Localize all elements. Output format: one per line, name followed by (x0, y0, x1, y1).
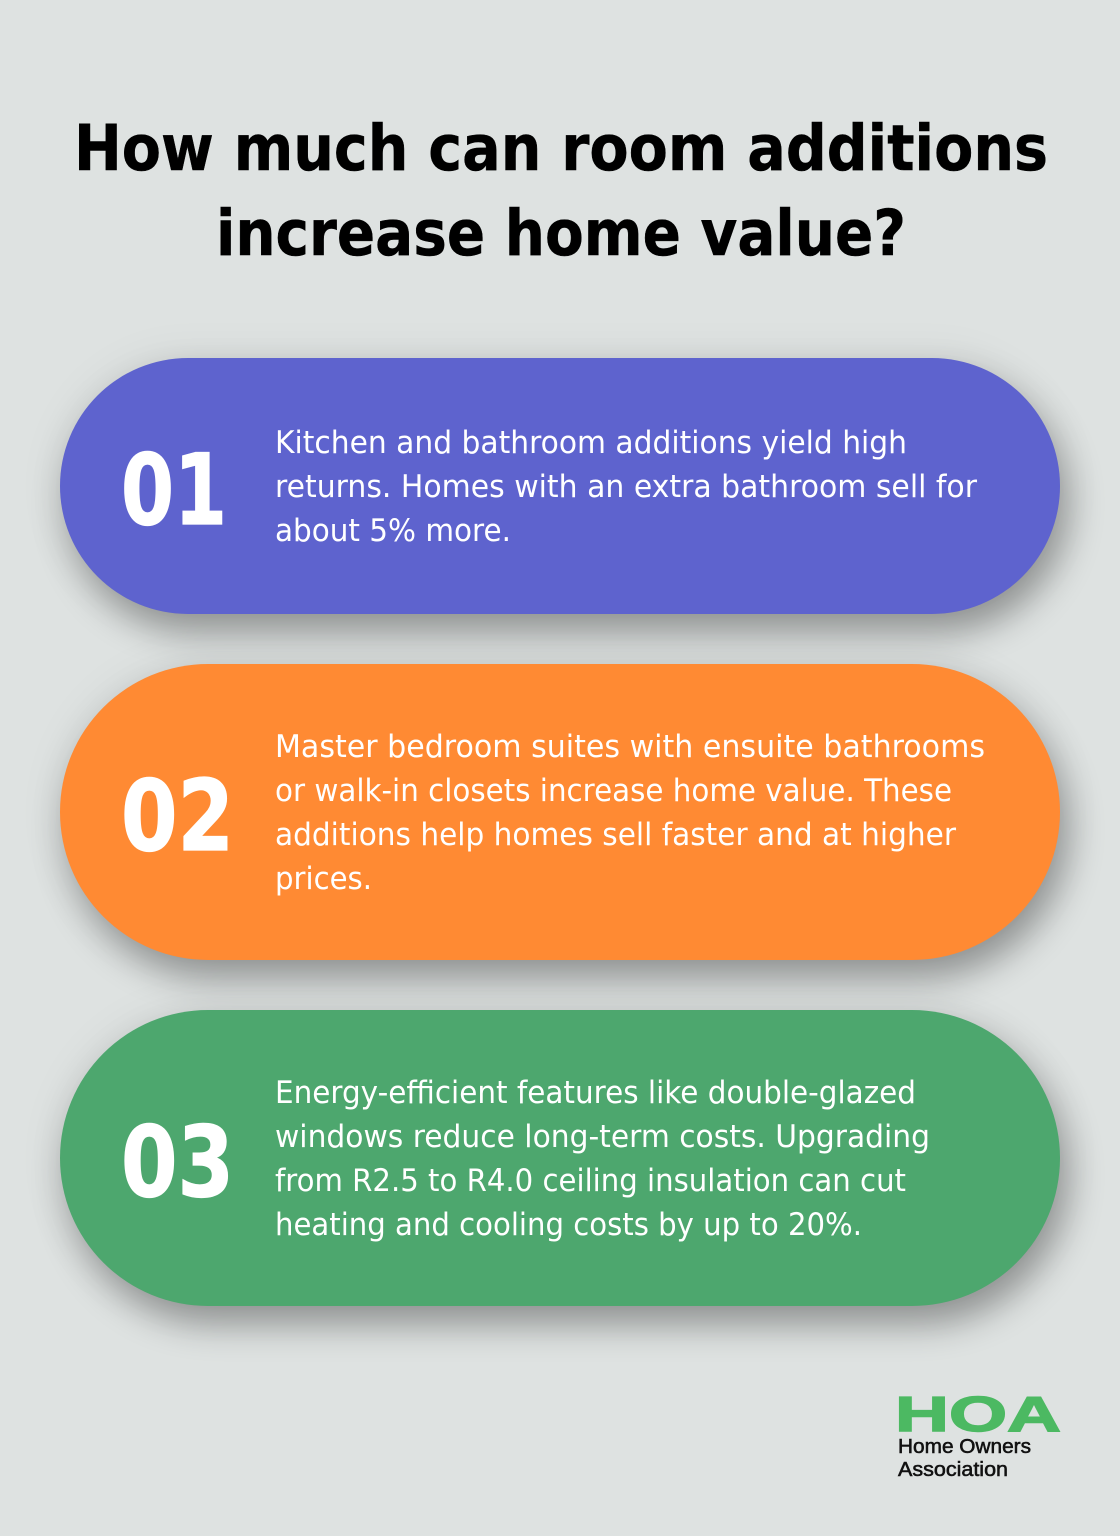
number 03: 03 (121, 1106, 234, 1220)
text: card 02: or walk-in closets increase home value. These (275, 773, 952, 809)
text: card 03: Energy-efficient features like double-glazed (275, 1075, 916, 1111)
number 02: 02 (121, 760, 234, 874)
logo: HOA (895, 1388, 1061, 1481)
text: card 01 (275, 425, 977, 549)
text: card 02 (275, 729, 985, 897)
text: card 01: returns. Homes with an extra bathroom sell for (275, 469, 977, 505)
text: card 02: Master bedroom suites with ensuite bathrooms (275, 729, 985, 765)
text: card 01: about 5% more. (275, 513, 511, 549)
logo: HOA: Association (898, 1459, 1008, 1481)
text: card 03 (275, 1075, 930, 1243)
text: card 03: from R2.5 to R4.0 ceiling insulation can cut (275, 1163, 906, 1199)
title: increase home value? (216, 197, 906, 270)
title: How much can room additions (74, 112, 1048, 185)
text: card 01: Kitchen and bathroom additions yield high (275, 425, 907, 461)
text: card 02: prices. (275, 861, 372, 897)
text: card 03: windows reduce long-term costs. Upgrading (275, 1119, 930, 1155)
logo: HOA: HOA (895, 1388, 1061, 1442)
panel: card 01 (40, 338, 1080, 634)
panel: card 02 (40, 644, 1080, 980)
number 01: 01 (121, 434, 227, 548)
text: card 02: additions help homes sell faster and at higher (275, 817, 956, 853)
panel: card 03 (40, 990, 1080, 1326)
logo: HOA: Home Owners (898, 1436, 1031, 1458)
title (74, 112, 1048, 270)
text: card 03: heating and cooling costs by up to 20%. (275, 1207, 862, 1243)
